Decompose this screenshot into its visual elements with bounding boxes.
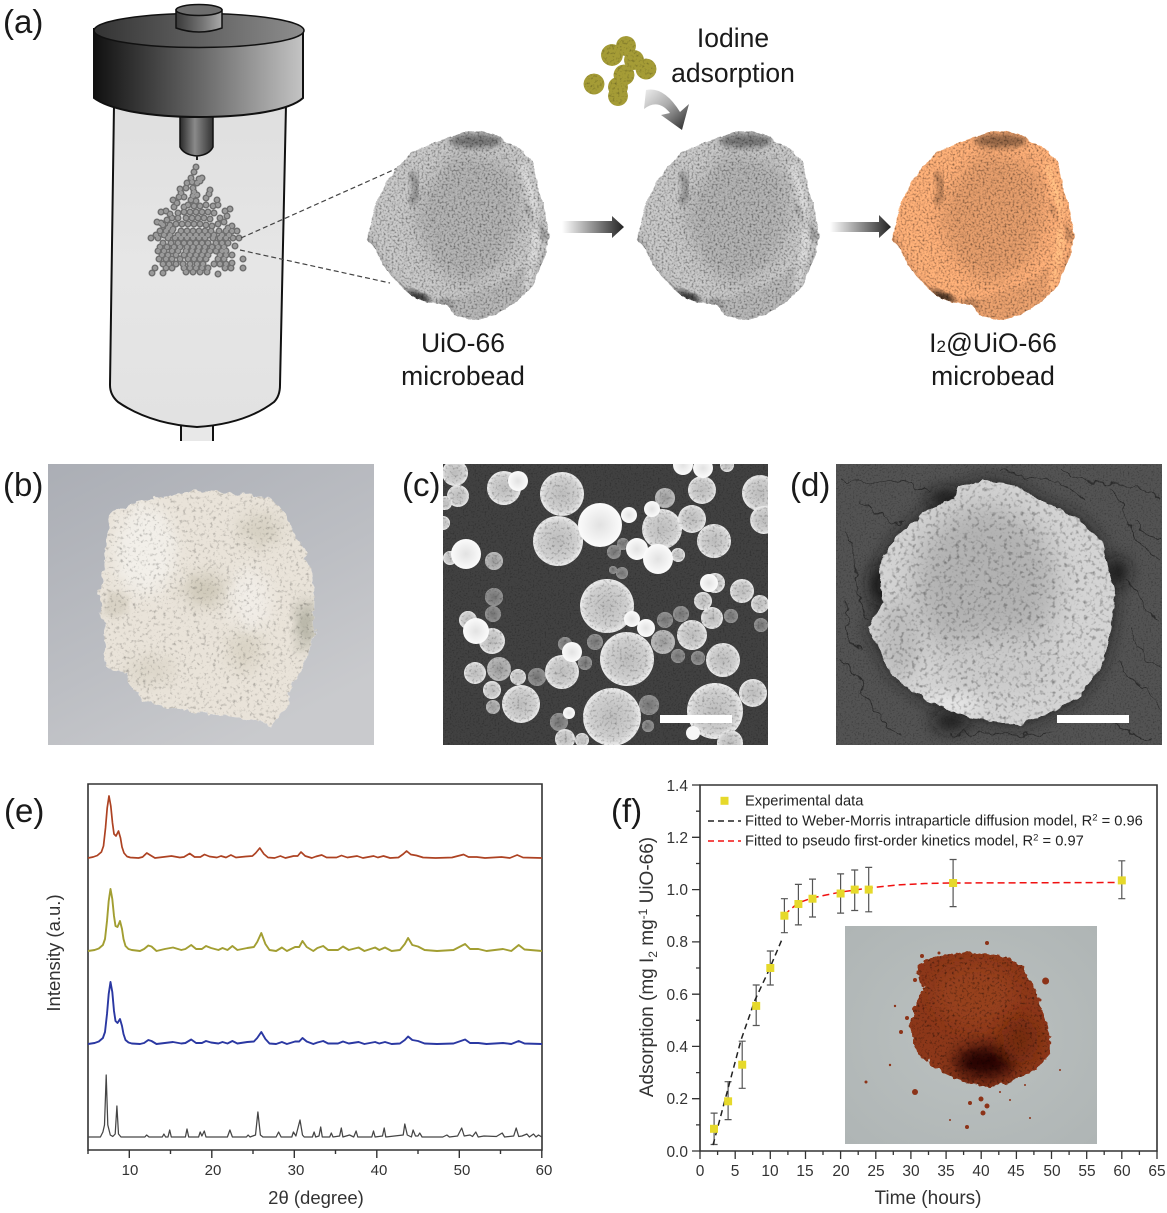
x tick labels	[122, 1162, 552, 1179]
x tick labels: 50	[454, 1162, 470, 1179]
nozzle tip	[196, 156, 198, 160]
legend text: Weber-Morris: Fitted to Weber-Morris intraparticle diffusion model, R	[745, 814, 1092, 830]
y tick labels: 0.0	[666, 1144, 688, 1161]
SEM background	[443, 464, 768, 745]
trace: olive	[88, 889, 542, 951]
legend text: pseudo first-order: = 0.97	[1038, 834, 1084, 850]
x tick labels: 20	[205, 1162, 221, 1179]
y axis title: UiO-66)	[637, 837, 658, 909]
panel: (e) XRD chart	[4, 784, 552, 1208]
x tick labels: 10	[761, 1163, 779, 1180]
cylinder body	[110, 105, 286, 427]
outlet walls	[181, 425, 213, 441]
legend text: Weber-Morris: = 0.96	[1098, 814, 1143, 830]
curved arrow	[644, 89, 689, 130]
XRD traces	[88, 796, 542, 1137]
dark halo	[868, 480, 1115, 725]
panel: (d) SEM of single bead	[790, 464, 1162, 745]
legend text: pseudo first-order: Fitted to pseudo first-order kinetics model, R	[745, 834, 1033, 850]
spray droplets	[151, 167, 243, 274]
label: iodine adsorption: adsorption	[671, 58, 795, 88]
large microbead	[868, 480, 1115, 725]
label: UiO-66 microbead: microbead	[401, 361, 525, 391]
lid	[94, 29, 303, 117]
x tick labels: 0	[696, 1163, 705, 1180]
y axis title: Intensity (a.u.)	[43, 894, 64, 1012]
x axis ticks	[88, 1150, 542, 1158]
y axis title: -1	[636, 908, 650, 919]
x tick labels: 10	[122, 1162, 138, 1179]
UiO-66 microbead	[355, 131, 550, 340]
y tick labels	[666, 778, 688, 1161]
x tick labels: 65	[1148, 1163, 1166, 1180]
y tick labels: 0.4	[666, 1039, 688, 1056]
scale bar	[660, 715, 732, 723]
panel label (b): (b)	[3, 466, 43, 503]
mid-grey particles	[485, 488, 675, 714]
panel: (b) powder photo	[3, 464, 374, 745]
x tick labels: 40	[371, 1162, 387, 1179]
x tick labels: 15	[796, 1163, 814, 1180]
orange I2@UiO-66 microbead	[880, 131, 1075, 340]
Weber-Morris fit line	[713, 937, 783, 1145]
trace: orange	[88, 796, 542, 858]
x tick labels: 60	[1113, 1163, 1131, 1180]
panel label (f): (f)	[611, 792, 642, 829]
scattered granules	[864, 941, 1061, 1129]
y tick labels: 0.2	[666, 1091, 688, 1108]
y tick labels: 1.2	[666, 830, 688, 847]
panel label (d): (d)	[790, 466, 830, 503]
label: I2@UiO-66 microbead: I2@UiO-66	[929, 328, 1057, 358]
light particles	[443, 464, 768, 745]
axes frame	[700, 785, 1157, 1151]
y axis title: mg	[637, 919, 658, 951]
lid knob	[176, 10, 222, 32]
x tick labels: 50	[1043, 1163, 1061, 1180]
y tick labels: 0.6	[666, 987, 688, 1004]
bright particles	[451, 455, 718, 719]
panel: (c) SEM of microbeads	[402, 455, 778, 756]
label: UiO-66 microbead: UiO-66	[421, 328, 505, 358]
legend text: experimental data: Experimental data	[745, 794, 864, 810]
microbead particles	[443, 464, 768, 745]
panel label (e): (e)	[4, 792, 44, 829]
knob top	[176, 4, 222, 16]
x tick labels: 20	[832, 1163, 850, 1180]
SEM background	[836, 464, 1162, 745]
axis ticks	[692, 785, 1157, 1159]
trace: blue	[88, 982, 542, 1044]
x tick labels: 30	[902, 1163, 920, 1180]
outlet tube	[181, 420, 213, 441]
y axis title: Adsorption (mg I	[637, 958, 658, 1097]
red-brown powder pile	[911, 952, 1050, 1087]
label: iodine adsorption: Iodine	[697, 23, 769, 53]
dark particles	[485, 538, 768, 732]
arrow 1	[562, 216, 624, 238]
x tick labels: 5	[731, 1163, 739, 1180]
error bars	[711, 860, 1125, 1144]
x tick labels: 45	[1007, 1163, 1025, 1180]
axes frame	[88, 784, 542, 1150]
photo background	[48, 464, 374, 745]
panel label (c): (c)	[402, 466, 440, 503]
x tick labels: 60	[536, 1162, 552, 1179]
shadow pockets	[870, 490, 1128, 730]
small bright particle	[686, 726, 700, 740]
legend text: Weber-Morris: 2	[1092, 812, 1098, 824]
iodine beads	[584, 36, 656, 106]
x tick labels: 35	[937, 1163, 955, 1180]
legend marker: experimental data	[720, 797, 728, 805]
x tick labels: 30	[288, 1162, 304, 1179]
white powder pile	[100, 492, 315, 725]
panel: (a)	[3, 3, 1075, 441]
x tick labels	[696, 1163, 1166, 1180]
icon: spray drying cylinder	[94, 4, 304, 441]
legend	[708, 794, 1143, 850]
pseudo first-order fit line	[784, 882, 1122, 915]
x tick labels: 55	[1078, 1163, 1096, 1180]
arrow 2	[830, 215, 891, 238]
legend line: pseudo first-order	[708, 840, 741, 842]
inset photo: iodine loaded powder	[845, 926, 1097, 1144]
y tick labels: 1.0	[666, 882, 688, 899]
y tick labels: 0.8	[666, 934, 688, 951]
surface cracks	[840, 470, 1160, 740]
y tick labels: 1.4	[666, 778, 688, 795]
experimental data points	[710, 876, 1126, 1133]
x tick labels: 25	[867, 1163, 885, 1180]
y axis title: 2	[646, 951, 660, 958]
scale bar	[1057, 715, 1129, 723]
x tick labels: 40	[972, 1163, 990, 1180]
x axis title: 2θ (degree)	[268, 1187, 364, 1208]
trace: grey reference pattern	[88, 1075, 542, 1137]
legend text: pseudo first-order: 2	[1033, 832, 1038, 844]
x axis title: Time (hours)	[875, 1188, 981, 1209]
photo background	[845, 926, 1097, 1144]
panel label (a): (a)	[3, 3, 43, 40]
zoom guide lines	[240, 167, 400, 283]
lid top face	[94, 14, 304, 48]
second UiO-66 microbead	[625, 131, 820, 340]
panel: (f) adsorption kinetics chart	[611, 778, 1166, 1209]
nozzle	[180, 116, 213, 156]
legend line: Weber-Morris	[708, 820, 741, 822]
label: I2@UiO-66 microbead: microbead	[931, 361, 1055, 391]
